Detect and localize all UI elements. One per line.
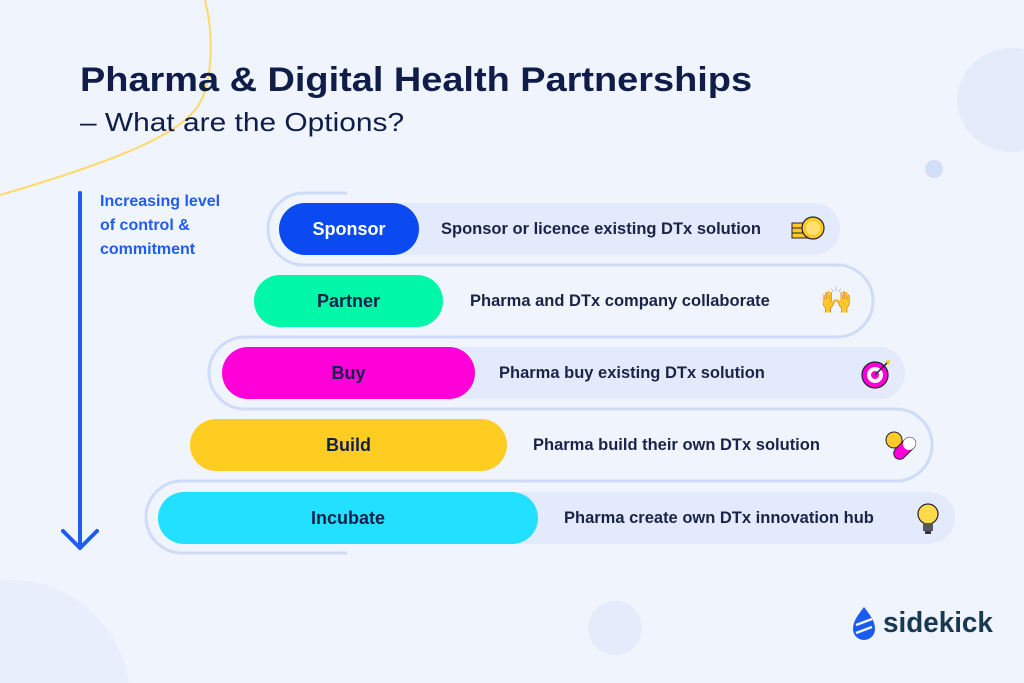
arrow: increasing control	[60, 191, 100, 550]
row: buy	[222, 347, 905, 399]
icon: light bulb	[917, 503, 939, 534]
axis label	[100, 193, 220, 258]
icon: high five: 🙌	[820, 285, 852, 315]
title: Pharma & Digital Health Partnerships	[80, 61, 752, 99]
row: incubate: Pharma create own DTx innovation hub	[564, 509, 874, 527]
axis label: commitment	[100, 241, 195, 258]
row: build: Build	[326, 434, 371, 454]
axis label: of control &	[100, 217, 190, 234]
row: incubate	[158, 492, 955, 544]
row: sponsor: Sponsor or licence existing DTx solution	[441, 220, 761, 238]
row: sponsor	[279, 203, 840, 255]
icon: target	[861, 360, 890, 389]
logo: sidekick: sidekick	[883, 607, 993, 639]
row: partner: Partner	[317, 290, 380, 310]
row: build: Pharma build their own DTx solution	[533, 436, 820, 454]
row: buy: Pharma buy existing DTx solution	[499, 364, 765, 382]
row: build	[190, 419, 916, 471]
row: incubate: Incubate	[311, 508, 385, 528]
subtitle: – What are the Options?	[80, 107, 404, 137]
row: partner	[254, 275, 852, 327]
axis label: Increasing level	[100, 193, 220, 210]
icon: pills	[886, 432, 916, 460]
row: buy: Buy	[331, 362, 366, 382]
row: partner: Pharma and DTx company collaborate	[470, 292, 770, 310]
row: sponsor: Sponsor	[312, 218, 386, 238]
icon: coins	[792, 216, 825, 240]
